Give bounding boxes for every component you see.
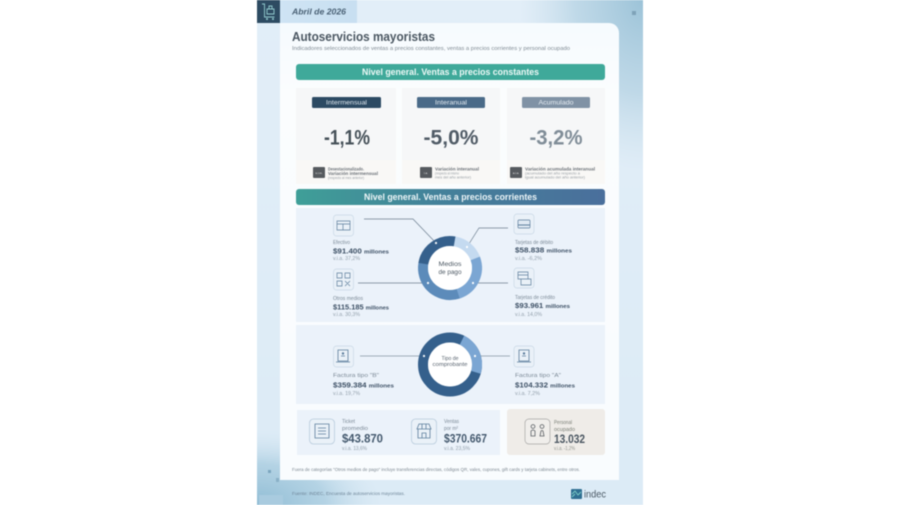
panel: acumulado	[507, 88, 605, 184]
stat: ventas por m2: v.i.a. 23,5%	[444, 446, 471, 452]
item: factura tipo A: v.i.a. 7,2%	[515, 391, 541, 397]
section heading: current prices	[296, 189, 605, 205]
caption: intermensual: Variación intermensual	[328, 171, 378, 176]
leader lines	[358, 219, 508, 283]
donut chart: tipo de comprobante	[414, 328, 486, 401]
caption: interanual: (respecto al mismo	[435, 172, 459, 176]
section heading: constant prices	[296, 64, 605, 80]
value: -3,2%: -3,2%	[530, 126, 583, 150]
item: otros medios: v.i.a. 30,3%	[333, 312, 361, 318]
caption: acumulado	[510, 166, 595, 180]
caption: acumulado: a.i.a.	[513, 171, 519, 175]
donut chart: medios de pago: Medios	[438, 261, 462, 268]
value: -1,1%: -1,1%	[324, 126, 370, 150]
stat: ticket promedio: v.i.a. 13,6%	[342, 446, 368, 452]
item: tarjetas de crédito: $93.961 millones	[515, 301, 570, 310]
item: tarjetas de débito: Tarjetas de débito	[515, 240, 553, 246]
main card	[280, 23, 619, 480]
panel: personal ocupado: v.i.a. -1,2%	[554, 446, 575, 452]
item: tarjetas de crédito	[514, 268, 570, 318]
caption: intermensual: (respecto al mes anterior)	[328, 176, 364, 180]
panel: personal ocupado	[507, 409, 605, 455]
caption: acumulado: (acumulado del año respecto a	[525, 172, 580, 176]
item: factura tipo B: v.i.a. 19,7%	[333, 391, 361, 397]
item: tarjetas de crédito: v.i.a. 14,0%	[515, 312, 543, 318]
panel: ticket y ventas	[297, 410, 500, 455]
stat: ticket promedio: $43.870	[342, 432, 383, 446]
panel: interanual	[402, 88, 500, 184]
item: tarjetas de débito: $58.838 millones	[515, 246, 572, 254]
title: Autoservicios mayoristas	[292, 30, 435, 44]
date tab	[280, 0, 357, 23]
stat: ventas por m2: por m²	[444, 426, 458, 432]
item: efectivo: Efectivo	[333, 240, 350, 246]
panel: personal ocupado: 13.032	[554, 434, 585, 446]
panel: medios de pago	[296, 208, 605, 322]
footnote: Fuera de categorías "Otros medios de pago" incluye transferencias directas, códigos QR, vales, cupones, gift cards y tarjeta cabinets, entre otros.	[292, 467, 580, 472]
subtitle: Indicadores seleccionados de ventas a precios constantes, ventas a precios corrientes y personal ocupado	[292, 46, 570, 52]
caption: interanual: mes del año anterior)	[435, 176, 471, 180]
caption: intermensual	[313, 166, 378, 180]
panel: personal ocupado: ocupado	[554, 427, 575, 433]
section heading: current prices: Nivel general. Ventas a precios corrientes	[364, 192, 537, 202]
item: factura tipo A: Factura tipo "A"	[515, 373, 561, 379]
value: -5,0%: -5,0%	[424, 126, 479, 150]
item: efectivo: $91.400 millones	[333, 246, 389, 256]
panel: intermensual	[296, 88, 396, 184]
item: otros medios: $115.185 millones	[333, 302, 389, 312]
source: Fuente: INDEC, Encuesta de autoservicios mayoristas.	[292, 491, 405, 496]
item: factura tipo A	[514, 346, 575, 397]
donut chart: tipo de comprobante: comprobante	[432, 362, 468, 368]
icon: people	[531, 425, 544, 436]
item: efectivo: v.i.a. 37,2%	[333, 256, 361, 262]
stat: ticket promedio: Ticket	[342, 419, 355, 425]
caption: acumulado: igual acumulado del año anterior)	[525, 176, 585, 180]
item: otros medios	[333, 269, 389, 318]
page background	[257, 0, 643, 505]
item: tarjetas de crédito: Tarjetas de crédito	[515, 295, 555, 301]
donut chart: medios de pago	[415, 233, 485, 303]
caption: intermensual: s.i.m.	[315, 171, 323, 175]
item: efectivo	[333, 215, 389, 262]
stat: ventas por m2: $370.667	[444, 432, 487, 446]
donut chart: tipo de comprobante: Tipo de	[442, 356, 459, 362]
donut chart: medios de pago: de pago	[438, 269, 462, 276]
item: tarjetas de débito	[514, 214, 572, 262]
stat: ventas por m2	[412, 419, 487, 452]
caption: acumulado: Variación acumulada interanual	[525, 166, 595, 172]
item: tarjetas de débito: v.i.a. -6,2%	[515, 256, 543, 262]
caption: interanual	[420, 166, 479, 180]
header icon: shopping cart	[257, 0, 280, 23]
item: otros medios: Otros medios	[333, 296, 363, 302]
stat: ticket promedio	[310, 419, 383, 452]
item: factura tipo B	[333, 346, 394, 397]
item: factura tipo A: $104.332 millones	[515, 380, 575, 390]
logo: indec	[571, 489, 606, 500]
label: acumulado: Acumulado	[538, 101, 574, 107]
label: interanual: Interanual	[435, 101, 467, 107]
section heading: constant prices: Nivel general. Ventas a precios constantes	[362, 67, 539, 77]
caption: interanual: i.a.	[424, 171, 428, 175]
logo: indec: indec	[584, 490, 606, 500]
stat: ventas por m2: Ventas	[444, 419, 459, 425]
label: intermensual: Intermensual	[326, 101, 367, 107]
date tab: Abril de 2026	[291, 8, 347, 16]
leader lines	[360, 355, 510, 357]
caption: intermensual: Desestacionalizado.	[328, 166, 364, 172]
panel: personal ocupado: Personal	[554, 420, 572, 426]
item: factura tipo B: $359.384 millones	[333, 380, 394, 390]
stat: ticket promedio: promedio	[342, 426, 368, 432]
caption: interanual: Variación interanual	[435, 166, 479, 172]
item: factura tipo B: Factura tipo "B"	[333, 373, 379, 379]
panel: tipo de comprobante	[296, 325, 605, 404]
